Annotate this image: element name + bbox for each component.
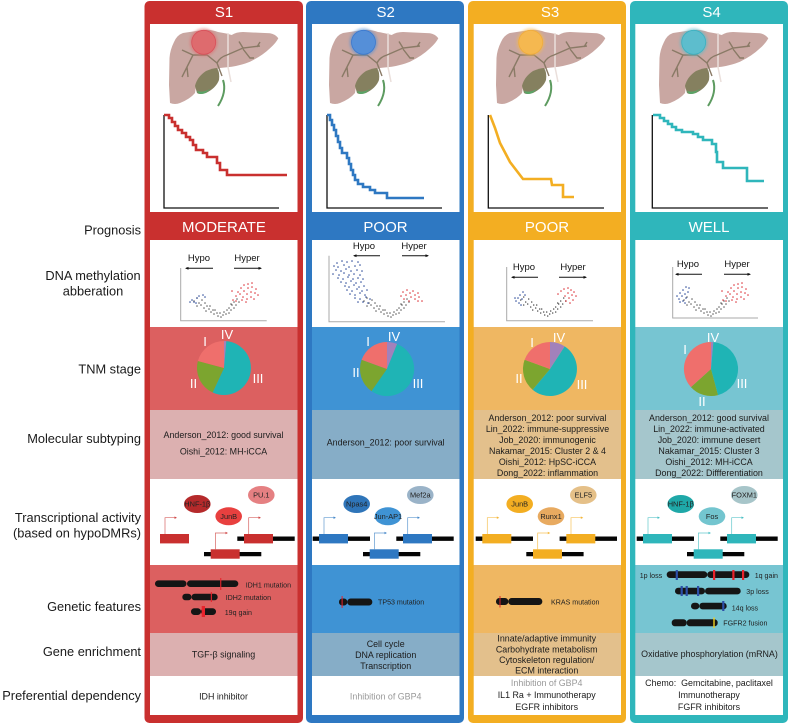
gene enrichment S3: Cytoskeleton regulation/ [499, 655, 595, 665]
heading S1: S1 [215, 4, 233, 21]
label: DNA methylation aberration: DNA methylation [45, 268, 141, 283]
label: molecular subtyping: Molecular subtyping [27, 431, 141, 446]
transcriptional activity S2: Npas4 [346, 500, 367, 509]
TNM pie S3 [474, 327, 621, 410]
genetic features S2 [312, 565, 460, 633]
TNM pie S1 [150, 327, 298, 410]
genetic features S4: 1q gain [755, 572, 778, 580]
transcriptional activity S2 [312, 479, 460, 565]
transcriptional activity S2: Mef2a [410, 491, 431, 500]
methylation section S2: Hypo [353, 241, 375, 252]
molecular subtyping S3: Job_2020: immunogenic [499, 435, 596, 445]
label: transcriptional activity [13, 510, 142, 540]
genetic features S1: 19q gain [225, 609, 252, 617]
panel background S3 [468, 1, 626, 723]
preferential dependency S2 [312, 676, 460, 715]
gene enrichment S3: ECM interaction [515, 665, 578, 675]
panel: S2 [306, 1, 464, 723]
methylation section S2: Hyper [401, 241, 427, 252]
gene enrichment S4 [635, 633, 783, 676]
panel background S2 [306, 1, 464, 723]
icon: liver with red tumor [169, 28, 278, 106]
TNM pie S3: I [530, 335, 534, 350]
genetic features S4: FGFR2 fusion [723, 620, 768, 628]
molecular subtyping S3: Oishi_2012: HpSC-iCCA [499, 457, 596, 467]
survival curve S2 [327, 115, 442, 208]
gene enrichment S1 [150, 633, 298, 676]
gene enrichment S4: Oxidative phosphorylation (mRNA) [641, 649, 778, 659]
liver and survival section S3 [474, 24, 621, 212]
molecular subtyping S1: Oishi_2012: MH-iCCA [180, 446, 267, 456]
transcriptional activity S3 [474, 479, 621, 565]
transcriptional activity S4 [635, 479, 783, 565]
liver and survival section S1 [150, 24, 298, 212]
methylation section S1 [150, 240, 298, 327]
panel: S3 [468, 1, 626, 723]
TNM pie S2: II [352, 365, 360, 380]
transcriptional activity S3: Runx1 [540, 512, 562, 521]
TNM pie S2: III [413, 376, 423, 391]
liver and survival section S2 [312, 24, 460, 212]
prognosis band S1: MODERATE [182, 219, 266, 236]
transcriptional activity S2: Jun-AP1 [374, 512, 402, 521]
panel: S1 [144, 1, 303, 723]
gene enrichment S2: Cell cycle [367, 639, 405, 649]
genetic features S1: IDH1 mutation [246, 582, 291, 590]
TNM pie S4: III [737, 376, 747, 391]
molecular subtyping S4: Oishi_2012: MH-iCCA [665, 457, 753, 467]
transcriptional activity S4: FOXM1 [732, 491, 757, 500]
panel background S1 [144, 1, 303, 723]
icon: liver with yellow tumor [496, 28, 605, 106]
genetic features S4: 14q loss [732, 604, 759, 612]
TNM pie S4: IV [707, 330, 719, 345]
preferential dependency S1 [150, 676, 298, 715]
label: DNA methylation aberration [45, 268, 141, 298]
transcriptional activity S4: HNF-1β [668, 500, 694, 509]
TNM pie S3: IV [553, 330, 565, 345]
TNM pie S1: III [253, 371, 263, 386]
preferential dependency S3: Inhibition of GBP4 [511, 678, 583, 688]
transcriptional activity S3: ELF5 [574, 491, 592, 500]
heading S2: S2 [377, 4, 395, 21]
prognosis band S4: WELL [689, 219, 729, 236]
label: DNA methylation aberration: abberation [63, 284, 123, 298]
genetic features S2: TP53 mutation [378, 599, 424, 607]
methylation section S3: Hyper [560, 262, 586, 273]
methylation section S2 [312, 240, 460, 327]
methylation section S4: Hyper [724, 259, 750, 270]
TNM pie S2: IV [388, 329, 400, 344]
panel background S4 [630, 1, 788, 723]
gene enrichment S1: TGF-β signaling [192, 650, 255, 660]
preferential dependency S3 [474, 676, 621, 715]
panel: S4 [630, 1, 788, 723]
preferential dependency S3: IL1 Ra + Immunotherapy [498, 690, 596, 700]
genetic features S4: 3p loss [746, 588, 769, 596]
molecular subtyping S3 [474, 410, 621, 479]
molecular subtyping S4 [635, 410, 783, 479]
TNM pie S4: II [698, 394, 706, 409]
preferential dependency S2: Inhibition of GBP4 [350, 692, 422, 702]
transcriptional activity S4: Fos [706, 512, 718, 521]
transcriptional activity S1: PU.1 [253, 491, 270, 500]
label: preferential dependency: Preferential dependency [2, 688, 142, 703]
molecular subtyping S4: Anderson_2012: good survival [649, 413, 769, 423]
methylation section S3: Hypo [513, 262, 535, 273]
methylation section S1: Hyper [234, 253, 260, 264]
molecular subtyping S1 [150, 410, 298, 479]
methylation section S4 [635, 240, 783, 327]
TNM pie S2: I [366, 334, 370, 349]
genetic features S1: IDH2 mutation [226, 594, 271, 602]
molecular subtyping S3: Dong_2022: inflammation [497, 468, 598, 478]
transcriptional activity S3: JunB [511, 500, 528, 509]
preferential dependency S4 [635, 676, 783, 715]
molecular subtyping S3: Nakamar_2015: Cluster 2 & 4 [489, 446, 606, 456]
label: transcriptional activity: (based on hypoDMRs) [13, 526, 141, 540]
molecular subtyping S4: Nakamar_2015: Cluster 3 [658, 446, 760, 456]
label: genetic features: Genetic features [47, 599, 141, 614]
methylation section S4: Hypo [677, 259, 699, 270]
molecular subtyping S4: Job_2020: immune desert [658, 435, 761, 445]
prognosis band S3: POOR [525, 219, 569, 236]
TNM pie S4 [635, 327, 783, 410]
icon: liver with blue tumor [329, 28, 438, 106]
gene enrichment S2 [312, 633, 460, 676]
molecular subtyping S3: Lin_2022: immune-suppressive [486, 424, 609, 434]
molecular subtyping S2 [312, 410, 460, 479]
heading S3: S3 [541, 4, 559, 21]
label: TNM stage: TNM stage [78, 362, 141, 376]
preferential dependency S1: IDH inhibitor [199, 692, 248, 702]
transcriptional activity S1: JunB [220, 512, 237, 521]
molecular subtyping S2: Anderson_2012: poor survival [327, 438, 445, 448]
heading S4: S4 [702, 4, 721, 21]
genetic features S3 [474, 565, 621, 633]
liver and survival section S4 [635, 24, 783, 212]
methylation section S3 [474, 240, 621, 327]
survival curve S4 [652, 115, 768, 208]
methylation section S1: Hypo [188, 253, 210, 264]
prognosis band S2: POOR [363, 219, 408, 236]
label: gene enrichment: Gene enrichment [43, 644, 141, 659]
transcriptional activity S1 [150, 479, 298, 565]
gene enrichment S3: Carbohydrate metabolism [496, 644, 598, 654]
TNM pie S2 [312, 327, 460, 410]
gene enrichment S3: Innate/adaptive immunity [497, 633, 597, 643]
genetic features S4: 1p loss [640, 572, 663, 580]
TNM pie S4: I [683, 342, 687, 357]
TNM pie S1: IV [221, 327, 233, 342]
survival curve S1 [164, 115, 287, 208]
gene enrichment S3 [474, 633, 621, 676]
label: prognosis: Prognosis [84, 222, 141, 238]
molecular subtyping S4: Dong_2022: Diffferentiation [655, 468, 763, 478]
genetic features S4 [635, 565, 783, 633]
preferential dependency S4: Chemo: Gemcitabine, paclitaxel [645, 678, 773, 688]
icon: liver with teal tumor [659, 28, 768, 106]
gene enrichment S2: Transcription [360, 661, 411, 671]
gene enrichment S2: DNA replication [355, 650, 416, 660]
genetic features S3: KRAS mutation [551, 598, 600, 606]
genetic features S1 [150, 565, 298, 633]
molecular subtyping S3: Anderson_2012: poor survival [489, 413, 606, 423]
preferential dependency S3: EGFR inhibitors [515, 702, 579, 712]
preferential dependency S4: FGFR inhibitors [678, 702, 741, 712]
TNM pie S1: I [203, 334, 207, 349]
molecular subtyping S4: Lin_2022: immune-activated [653, 424, 765, 434]
molecular subtyping S1: Anderson_2012: good survival [164, 430, 283, 440]
preferential dependency S4: Immunotherapy [678, 690, 740, 700]
TNM pie S3: III [577, 377, 587, 392]
survival curve S3 [488, 115, 604, 208]
TNM pie S3: II [515, 371, 523, 386]
row labels [2, 222, 142, 703]
label: transcriptional activity: Transcriptional activity [15, 510, 142, 525]
TNM pie S1: II [190, 376, 197, 391]
transcriptional activity S1: HNF-1β [184, 500, 210, 509]
